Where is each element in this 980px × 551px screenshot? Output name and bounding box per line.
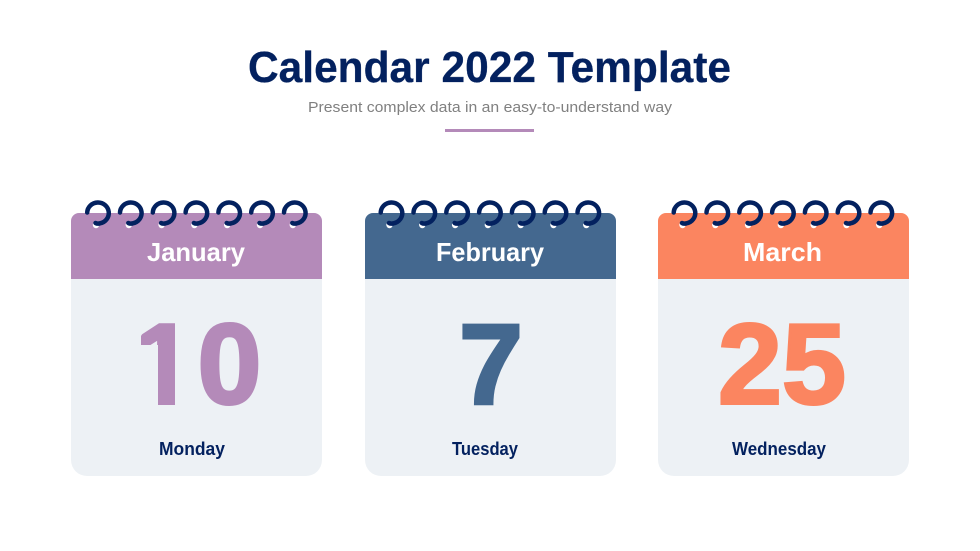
weekday: Wednesday	[732, 439, 826, 459]
date number: 25	[718, 302, 846, 428]
spiral binding	[87, 202, 306, 228]
panel: March calendar	[658, 202, 909, 476]
title underline	[445, 129, 534, 132]
spiral binding	[381, 202, 599, 228]
spiral binding	[674, 202, 892, 228]
panel: January calendar	[71, 202, 322, 476]
panel: February calendar	[365, 202, 616, 476]
date number	[141, 322, 258, 406]
date number: 7	[459, 302, 523, 428]
date number: 0	[198, 302, 262, 428]
month header	[71, 213, 322, 279]
calendar page	[71, 279, 322, 476]
month header	[365, 213, 616, 279]
weekday: Monday	[159, 439, 225, 459]
subtitle: Present complex data in an easy-to-understand way	[308, 99, 673, 116]
calendar page	[365, 279, 616, 476]
month name: February	[436, 237, 545, 267]
calendar page	[658, 279, 909, 476]
month name: March	[743, 237, 822, 267]
month name: January	[147, 237, 246, 267]
title: Calendar 2022 Template	[248, 43, 731, 92]
month header	[658, 213, 909, 279]
date number: 1	[132, 302, 195, 428]
weekday: Tuesday	[452, 439, 518, 459]
